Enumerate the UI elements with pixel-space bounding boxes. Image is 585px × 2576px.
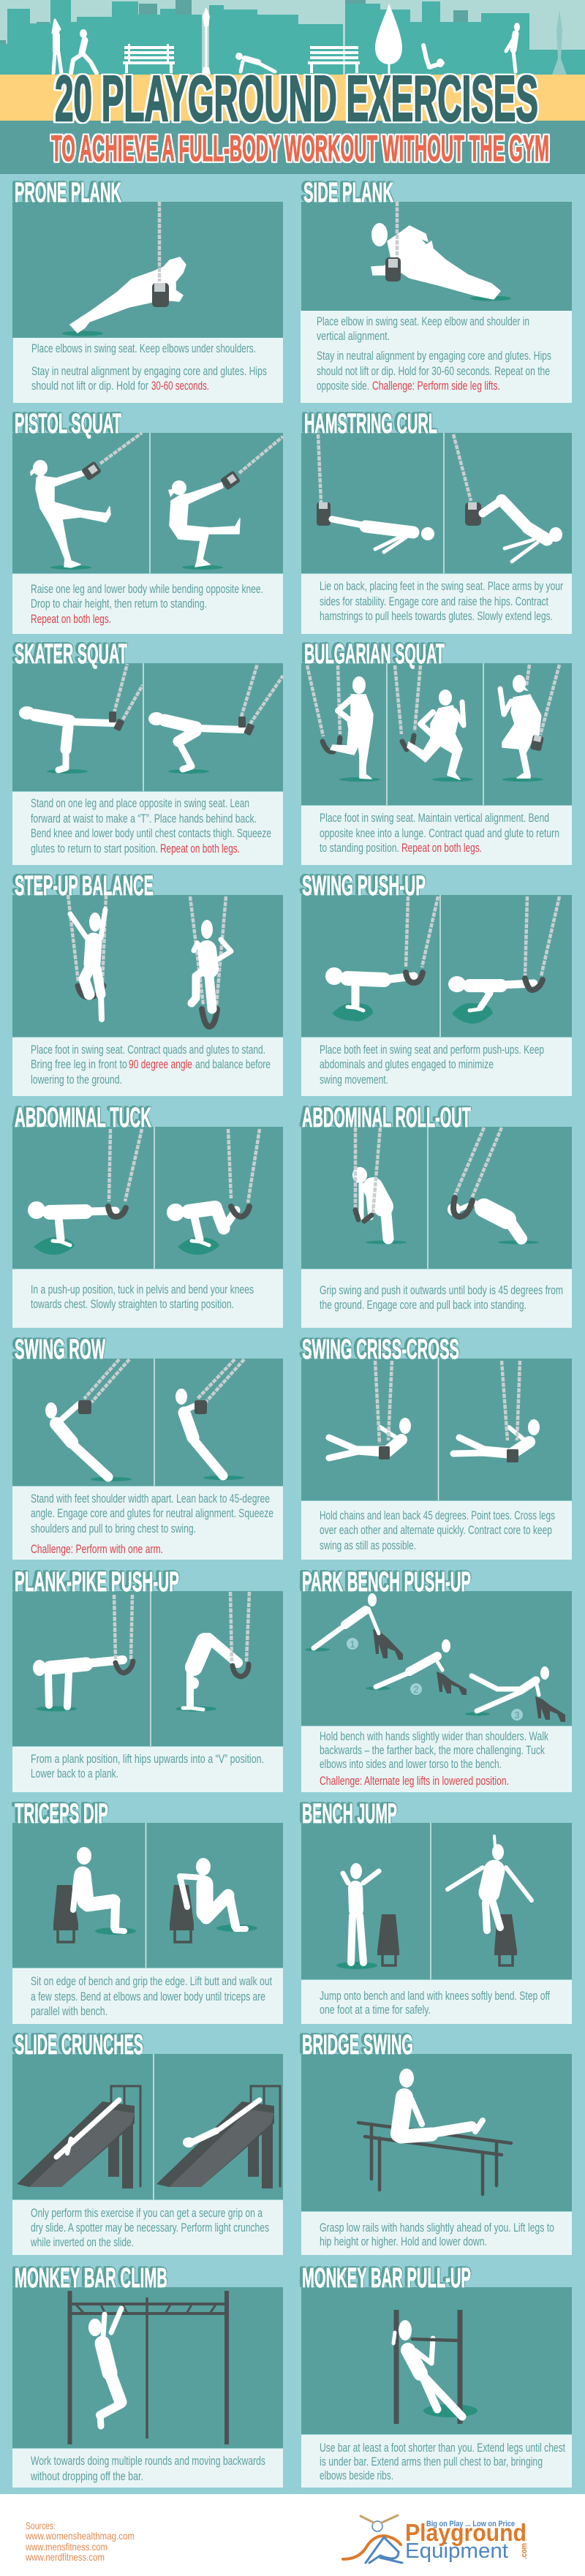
text: skater squat instructions: Bend knee and lower body until chest contacts thigh. Squeeze (31, 826, 271, 840)
panel: bench jump (301, 1799, 572, 2024)
illustration: criss-cross one (329, 1361, 411, 1459)
text: pistol squat instructions (31, 582, 263, 626)
panel: pistol squat (12, 409, 283, 634)
text: slide crunches instructions (30, 2206, 269, 2249)
text: side plank instructions (317, 314, 551, 393)
panel: bulgarian squat (301, 639, 572, 865)
heading: skater squat: SKATER SQUAT (15, 639, 127, 670)
text: prone plank instructions: should not lift or dip. Hold for (31, 379, 148, 393)
illustration: park bench step 1 (305, 1593, 403, 1660)
text: plank-pike instructions (31, 1752, 264, 1780)
text: step-up balance instructions: and balance before (195, 1057, 271, 1071)
dark title band (0, 121, 585, 174)
panel: swing criss-cross (301, 1334, 572, 1560)
icon: stretching person (53, 20, 61, 73)
icon: sit-up person (423, 45, 444, 67)
text: skater squat instructions: glutes to return to start position. (31, 842, 158, 855)
text: skater squat instructions: forward at waist to make a “T”. Place hands behind back. (31, 812, 257, 826)
panel: abdominal roll-out (301, 1103, 572, 1328)
text: park bench instructions (320, 1729, 548, 1788)
illustration: park bench step 3: 3 (514, 1710, 520, 1721)
illustration: slide crunches flat (17, 2086, 140, 2188)
panel: bridge swing (301, 2030, 572, 2255)
panel: abdominal tuck (12, 1103, 283, 1328)
text: bulgarian squat instructions: to standing position. (320, 841, 399, 855)
heading: swing row: SWING ROW (15, 1334, 105, 1365)
text: triceps dip instructions (31, 1974, 272, 2018)
sources: www.womenshealthmag.com (25, 2530, 135, 2542)
illustration: park bench step 3 (465, 1666, 565, 1722)
illustration: abdominal tuck bent (167, 1129, 260, 1255)
illustration: swing push-up high (325, 896, 438, 1021)
illustration: triceps dip down (170, 1858, 257, 1942)
text: monkey bar pull-up instructions (320, 2441, 565, 2482)
text: slide crunches instructions: while inverted on the slide. (30, 2235, 134, 2249)
icon: quad stretch person (506, 23, 520, 72)
text: hamstring curl instructions (320, 579, 563, 623)
text: slide crunches instructions: Only perform this exercise if you can get a secure grip on a (31, 2206, 263, 2220)
logo: Playground Equipment: Playground (405, 2519, 526, 2546)
illustration: roll-out extended (448, 1128, 539, 1244)
text: plank-pike instructions: From a plank position, lift hips upwards into a “V” position. (31, 1752, 264, 1766)
panel: slide crunches (12, 2030, 283, 2255)
heading: triceps dip: TRICEPS DIP (15, 1799, 108, 1829)
illustration: step-up balance side (190, 896, 231, 1027)
text: swing row instructions: angle. Engage core and glutes for neutral alignment. Squeeze (31, 1506, 273, 1520)
text: triceps dip instructions: a few steps. Bend at elbows and lower body until triceps are (31, 1990, 265, 2003)
sources: www.mensfitness.com (25, 2541, 107, 2553)
text: bulgarian squat instructions (320, 811, 559, 855)
text: swing row instructions (31, 1492, 273, 1556)
heading: hamstring curl: HAMSTRING CURL (304, 409, 437, 439)
icon: push-up person (235, 53, 275, 72)
heading: slide crunches: SLIDE CRUNCHES (15, 2030, 143, 2061)
text: bridge swing instructions (320, 2221, 554, 2248)
text: step-up balance instructions: 90 degree angle (129, 1057, 192, 1071)
text: pistol squat instructions: Raise one leg and lower body while bending opposite knee. (31, 582, 263, 596)
text: monkey bar climb instructions: without dropping off the bar. (30, 2469, 143, 2483)
text: swing push-up instructions: abdominals and glutes engaged to minimize (320, 1057, 494, 1071)
panel: swing push-up (301, 871, 572, 1096)
text: prone plank instructions: Stay in neutral alignment by engaging core and glutes. Hips (31, 364, 267, 378)
text: side plank instructions: opposite side. (317, 379, 369, 393)
panel: prone plank (12, 178, 283, 403)
illustration: roll-out standing (352, 1128, 407, 1244)
text: prone plank instructions: 30-60 seconds. (151, 379, 209, 393)
heading: side plank: SIDE PLANK (303, 178, 393, 208)
sources: Sources: (26, 2520, 56, 2531)
text: park bench instructions: Challenge: Alternate leg lifts in lowered position. (320, 1774, 509, 1788)
illustration: park bench step 2: 2 (413, 1684, 419, 1695)
illustration: prone plank figure (62, 202, 186, 336)
logo: Playground Equipment: .com (520, 2543, 529, 2559)
illustration: park bench step 2 (366, 1639, 467, 1695)
text: abdominal tuck instructions: In a push-up position, tuck in pelvis and bend your knees (31, 1283, 254, 1296)
text: swing row instructions: shoulders and pull to bring chest to swing. (31, 1522, 196, 1536)
illustration: pike position (176, 1592, 249, 1711)
text: swing row instructions: Challenge: Perform with one arm. (31, 1542, 163, 1556)
yellow title band (0, 75, 585, 121)
illustration: skater squat standing (19, 664, 143, 774)
illustration: bulgarian squat raised (500, 665, 559, 782)
panel: triceps dip (12, 1799, 283, 2024)
heading: step-up balance: STEP-UP BALANCE (15, 871, 154, 902)
text: skater squat instructions: Repeat on both legs. (160, 842, 240, 855)
text: skater squat instructions: Stand on one leg and place opposite in swing seat. Lean (31, 796, 249, 810)
text: prone plank instructions: Place elbows in swing seat. Keep elbows under shoulders. (31, 341, 256, 355)
illustration: side plank figure (371, 202, 511, 301)
illustration: pistol squat standing (30, 433, 142, 570)
heading: monkey bar climb: MONKEY BAR CLIMB (15, 2263, 167, 2294)
heading: abdominal tuck: ABDOMINAL TUCK (15, 1103, 151, 1133)
text: monkey bar pull-up instructions: elbows beside ribs. (320, 2469, 393, 2482)
heading: plank-pike push-up: PLANK-PIKE PUSH-UP (15, 1567, 179, 1598)
illustration: pull-up bar figure (393, 2310, 478, 2424)
text: swing row instructions: Stand with feet shoulder width apart. Lean back to 45-degree (31, 1492, 270, 1506)
panel: side plank (301, 178, 572, 403)
text: side plank instructions: Challenge: Perform side leg lifts. (372, 379, 500, 393)
illustration: plank position (33, 1595, 133, 1711)
text: park bench instructions: elbows into sides and lower torso to the bench. (320, 1757, 502, 1771)
illustration: abdominal tuck straight (28, 1129, 142, 1255)
illustration: bench jump ready (336, 1863, 399, 1969)
panel: hamstring curl (301, 409, 572, 634)
text: triceps dip instructions: parallel with bench. (31, 2004, 107, 2018)
illustration: bulgarian squat start (307, 665, 380, 782)
text: step-up balance instructions (31, 1043, 271, 1087)
text: prone plank instructions (31, 341, 267, 393)
text: monkey bar climb instructions (30, 2454, 265, 2483)
text: skater squat instructions (31, 796, 271, 855)
icon: park bench left (123, 44, 175, 73)
illustration: monkey bars (70, 2291, 227, 2444)
illustration: bench jump airborne (448, 1836, 532, 1965)
text: step-up balance instructions: lowering to the ground. (31, 1073, 122, 1087)
illustration: park bench step 1: 1 (350, 1639, 355, 1650)
heading: pistol squat: PISTOL SQUAT (15, 409, 121, 439)
panel: plank-pike push-up (12, 1567, 283, 1792)
illustration: swing row pulled (176, 1359, 244, 1480)
icon: tree (375, 4, 402, 75)
panel: monkey bar climb (12, 2263, 283, 2488)
text: bridge swing instructions: hip height or higher. Hold and lower down. (320, 2235, 487, 2248)
text: bench jump instructions: one foot at a time for safely. (320, 2003, 431, 2017)
heading: swing push-up: SWING PUSH-UP (302, 871, 426, 902)
logo: Playground Equipment: Equipment (405, 2539, 508, 2563)
heading: bench jump: BENCH JUMP (302, 1799, 397, 1829)
logo: Playground Equipment: Big on Play ... Low on Price (426, 2520, 515, 2528)
illustration: hamstring curl raised (453, 434, 562, 562)
text: side plank instructions: vertical alignment. (317, 329, 390, 343)
sources (25, 2520, 135, 2563)
icon: lamp post (202, 7, 211, 75)
text: pistol squat instructions: Drop to chair height, then return to standing. (31, 597, 207, 611)
text: bulgarian squat instructions: Repeat on both legs. (401, 841, 482, 855)
sources: www.nerdfitness.com (25, 2551, 105, 2563)
text: pistol squat instructions: Repeat on both legs. (31, 612, 111, 626)
text: slide crunches instructions: dry slide. A spotter may be necessary. Perform light crunches (31, 2221, 269, 2235)
illustration: step-up balance front (68, 895, 106, 1019)
text: swing push-up instructions: swing movement. (320, 1073, 388, 1087)
illustration: bulgarian squat lunge (395, 665, 473, 782)
text: roll-out instructions (320, 1283, 563, 1312)
logo: Playground Equipment (343, 2515, 529, 2563)
illustration: hamstring curl flat (317, 434, 434, 552)
header: park skyline (0, 0, 585, 75)
illustration: pistol squat lowered (168, 437, 283, 570)
panel: skater squat (12, 639, 283, 865)
text: triceps dip instructions: Sit on edge of bench and grip the edge. Lift butt and walk out (31, 1974, 272, 1988)
icon: park bench right (308, 46, 360, 73)
text: abdominal tuck instructions: towards chest. Slowly straighten to starting position. (31, 1297, 234, 1311)
illustration: slide crunches curled (156, 2086, 280, 2188)
icon: logo kid on slide (343, 2515, 402, 2563)
heading: bulgarian squat: BULGARIAN SQUAT (304, 639, 445, 670)
illustration: swing push-up lowered (448, 896, 559, 1024)
text: step-up balance instructions: Bring free leg in front to (31, 1057, 127, 1071)
heading: bridge swing: BRIDGE SWING (302, 2030, 413, 2061)
text: step-up balance instructions: Place foot in swing seat. Contract quads and glutes to stand. (31, 1043, 265, 1057)
panel: step-up balance (12, 871, 283, 1096)
text: abdominal tuck instructions (31, 1283, 254, 1311)
panel: park bench push-up (301, 1567, 572, 1792)
illustration: triceps dip up (53, 1847, 136, 1942)
illustration: swing row extended (45, 1359, 132, 1481)
text: bench jump instructions (320, 1989, 550, 2017)
illustration: criss-cross two (453, 1361, 540, 1462)
text: monkey bar climb instructions: Work towards doing multiple rounds and moving backwards (31, 2454, 265, 2468)
illustration: bridge swing figure on parallel bars (358, 2069, 511, 2194)
text: criss-cross instructions: swing as still as possible. (320, 1538, 416, 1552)
text: criss-cross instructions (320, 1508, 555, 1552)
panel: swing row (12, 1334, 283, 1560)
heading: prone plank: PRONE PLANK (15, 178, 121, 208)
icon: lunging person (71, 29, 97, 73)
panel: monkey bar pull-up (301, 2263, 572, 2488)
text: swing push-up instructions (320, 1043, 544, 1087)
illustration: skater squat lowered (148, 664, 283, 774)
text: plank-pike instructions: Lower back to a plank. (31, 1767, 118, 1780)
